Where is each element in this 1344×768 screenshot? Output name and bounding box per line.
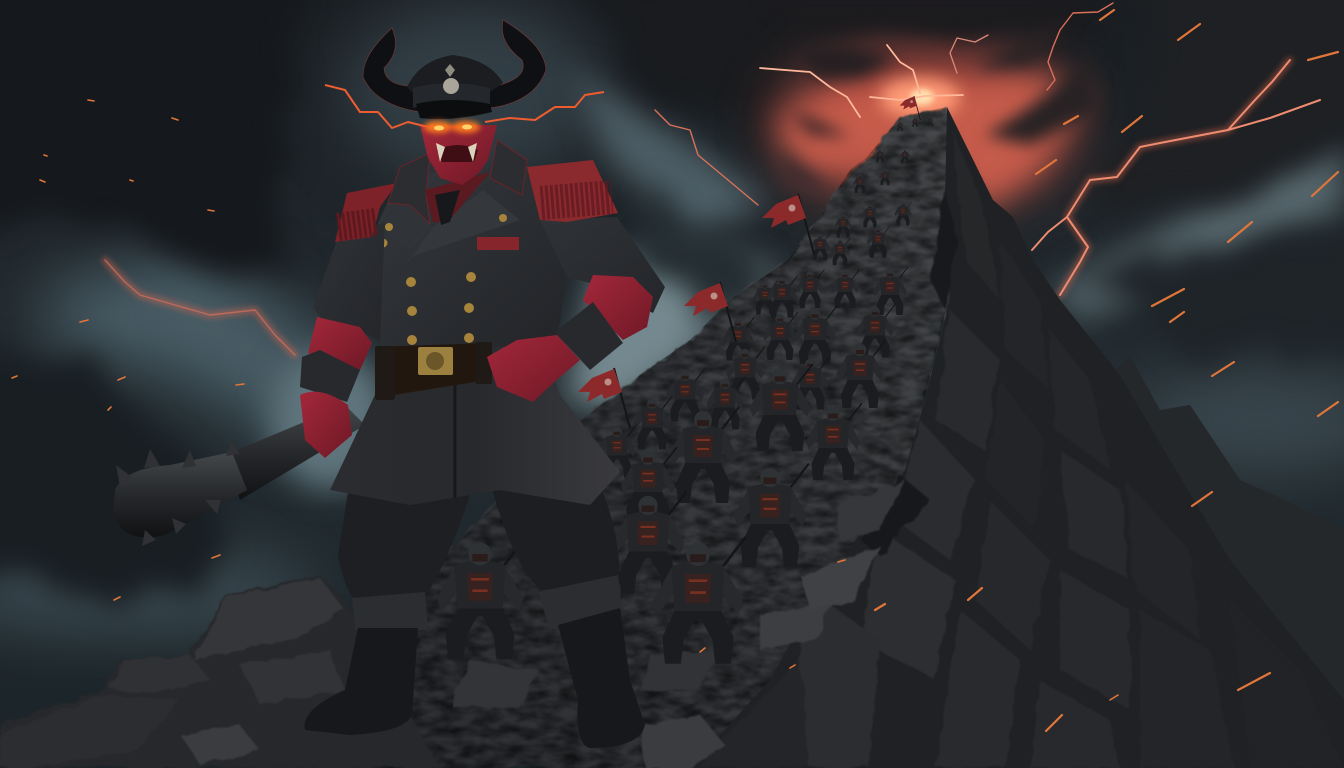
foreground rocks and slabs — [0, 480, 905, 768]
arm on hip — [487, 217, 665, 402]
dark right cliff face — [690, 107, 1344, 768]
glowing eyes and fire — [325, 85, 604, 133]
war banners — [578, 96, 920, 428]
distant ridge — [1040, 356, 1344, 768]
dark clouds crossing the glow — [760, 0, 1100, 190]
spiked club — [113, 405, 365, 546]
officer cap with skull — [407, 55, 503, 119]
fringed epaulettes — [335, 160, 618, 242]
mountain — [300, 107, 1344, 768]
head — [420, 125, 497, 185]
belt and buckle — [375, 342, 492, 400]
lightning bolts — [105, 3, 1320, 355]
lit slope with the trail — [300, 107, 958, 768]
army of soldiers climbing the slope — [437, 96, 934, 664]
collar — [388, 140, 527, 225]
dark storm clouds — [0, 0, 1344, 600]
demon general — [113, 20, 665, 748]
red glow behind the summit — [760, 0, 1100, 210]
cliff rock facets — [700, 130, 1344, 768]
legs — [338, 465, 622, 630]
boots — [304, 608, 645, 748]
arm holding club — [300, 222, 385, 458]
coat — [330, 165, 620, 505]
horns — [363, 20, 546, 112]
